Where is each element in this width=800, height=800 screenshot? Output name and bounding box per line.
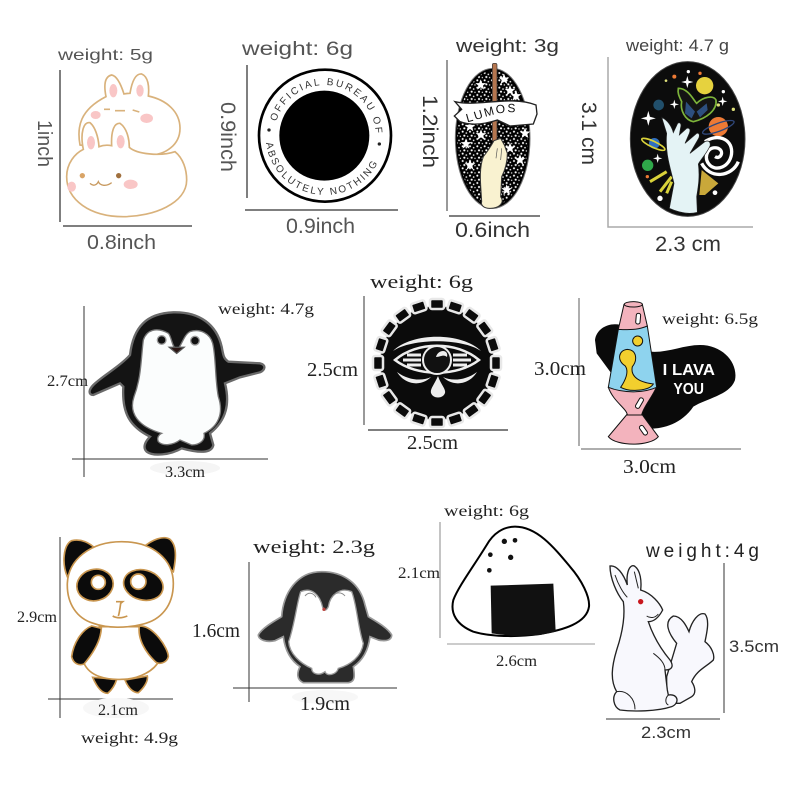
height line — [723, 563, 725, 713]
height label: 2.1cm — [398, 565, 441, 582]
pin: round black and white badge — [258, 68, 392, 203]
pin group: bunny stack — [33, 47, 192, 254]
shadow — [83, 698, 149, 718]
lamp base — [608, 414, 658, 444]
weight label: weight: 6.5g — [662, 311, 758, 328]
pin group: official bureau badge — [216, 39, 398, 238]
lamp slogan second line: YOU — [673, 381, 704, 398]
weight label: weight: 3g — [455, 36, 559, 56]
nose and mouth — [113, 602, 127, 618]
weight label: weight:4g — [645, 541, 759, 562]
pin group: onigiri — [398, 503, 595, 670]
shadow — [150, 461, 220, 475]
pin: I lava you — [595, 302, 735, 444]
front rabbit — [610, 566, 677, 711]
width line — [447, 643, 595, 645]
lamp top section — [618, 304, 647, 330]
pin group: rabbits — [606, 541, 779, 742]
width label: 3.0cm — [623, 456, 676, 478]
orange planet — [709, 117, 728, 136]
wand — [492, 63, 497, 142]
pin group: crying eye badge — [307, 272, 508, 454]
eye patches — [73, 565, 167, 605]
height label: 3.0cm — [534, 358, 586, 380]
badge dots — [267, 128, 381, 146]
blue planet — [649, 138, 660, 149]
width label: 2.5cm — [407, 432, 458, 454]
scattered light dots — [657, 70, 735, 201]
penguin belly — [132, 330, 221, 445]
yellow planet ring — [641, 136, 666, 152]
butterfly wings — [685, 102, 708, 118]
planet ring — [701, 118, 735, 137]
top bunny ears and face — [91, 84, 153, 123]
nori — [491, 584, 556, 636]
width line — [48, 698, 173, 700]
green planet — [642, 160, 653, 171]
rice body — [452, 527, 589, 636]
pin group: large penguin — [47, 301, 314, 481]
weight label: weight: 6g — [241, 39, 353, 60]
height line — [248, 562, 250, 702]
width label: 2.6cm — [496, 653, 538, 670]
height label: 0.9inch — [216, 102, 239, 172]
eye outline — [395, 346, 479, 373]
pin: two stacked bunnies — [67, 74, 187, 217]
badge ring — [259, 70, 391, 202]
pin: two white rabbits — [610, 566, 714, 711]
weight label: weight: 4.7 g — [625, 36, 729, 55]
lower lid — [397, 372, 477, 383]
pin: panda — [64, 538, 175, 693]
sesame seeds — [487, 538, 517, 573]
sparkle stars — [641, 76, 727, 163]
penguin eyes — [157, 336, 199, 345]
weight label: weight: 4.9g — [81, 730, 178, 747]
width label: 0.9inch — [286, 215, 355, 238]
top bunny — [79, 74, 180, 155]
height label: 1.2inch — [418, 95, 441, 168]
pin: lumos hand and wand — [453, 63, 538, 209]
height line — [439, 522, 441, 638]
width label: 1.9cm — [300, 693, 350, 715]
width line — [368, 429, 508, 431]
pin group: lumos — [418, 36, 559, 242]
butterfly outline — [678, 88, 716, 122]
beak — [322, 608, 326, 611]
yellow moon — [696, 77, 713, 94]
width line — [72, 458, 268, 460]
eyes — [91, 574, 146, 589]
galaxy spiral — [702, 138, 738, 174]
height label: 2.9cm — [17, 609, 58, 626]
penguin belly — [289, 590, 363, 675]
height label: 2.7cm — [47, 373, 89, 390]
width label: 0.8inch — [87, 232, 156, 254]
weight label: weight: 2.3g — [253, 537, 376, 558]
badge top text: OFFICIAL BUREAU OF — [270, 78, 382, 132]
stars — [461, 74, 530, 195]
rear rabbit — [667, 614, 714, 703]
width line — [606, 718, 720, 720]
penguin body — [258, 572, 392, 683]
pin: smiling penguin — [258, 572, 392, 683]
iris rays — [403, 355, 471, 365]
tear — [431, 376, 445, 398]
badge bottom text: ABSOLUTELY NOTHING — [266, 142, 376, 195]
eye brow — [393, 337, 481, 351]
lamp cap — [624, 302, 642, 307]
width line — [449, 215, 540, 217]
width line — [245, 209, 398, 211]
pin group: lava lamp — [534, 298, 758, 478]
pin: rice ball — [452, 527, 589, 636]
weight label: weight: 5g — [57, 47, 153, 64]
height line — [59, 537, 61, 718]
height label: 3.1 cm — [577, 102, 600, 165]
lamp glass — [608, 326, 657, 392]
height line — [363, 296, 365, 425]
body — [83, 627, 159, 679]
pupil highlight — [436, 351, 447, 357]
dot field — [457, 71, 528, 206]
width label: 2.3 cm — [655, 233, 721, 256]
feet — [93, 676, 147, 693]
weight label: weight: 6g — [444, 503, 529, 520]
rabbit details — [615, 572, 668, 709]
height line — [83, 306, 85, 477]
pin: penguin with open wings — [90, 312, 264, 455]
width line — [581, 448, 741, 450]
arms — [72, 626, 168, 665]
closed eyes — [305, 593, 345, 597]
hand — [480, 138, 507, 208]
height label: 3.5cm — [729, 637, 779, 656]
small teal planet — [653, 100, 664, 110]
pin group: panda — [17, 537, 178, 747]
height line — [59, 70, 61, 222]
bottom bunny ears and face — [67, 135, 138, 192]
pin: hand holding galaxy — [630, 62, 745, 216]
head — [67, 542, 173, 627]
bottom bunny — [67, 123, 187, 217]
weight label: weight: 6g — [370, 272, 474, 293]
lamp glints — [635, 313, 648, 436]
yellow streaks — [650, 172, 672, 193]
width line — [233, 687, 397, 689]
ears — [64, 538, 175, 577]
width label: 2.1cm — [98, 702, 139, 719]
shadow — [292, 690, 358, 704]
height label: 1.6cm — [192, 620, 240, 642]
width label: 2.3cm — [641, 723, 691, 742]
lava blob — [620, 349, 653, 390]
pin group: cosmic hand — [577, 36, 753, 256]
banner — [454, 101, 537, 126]
pin group: small penguin — [192, 537, 397, 715]
badge disc — [380, 306, 494, 420]
height line — [446, 60, 448, 211]
banner text: LUMOS — [466, 104, 515, 122]
lava bubble — [633, 336, 643, 346]
finger lines — [496, 148, 502, 160]
starry oval — [455, 68, 530, 208]
penguin beak — [169, 347, 184, 353]
lamp slogan: I LAVA — [663, 362, 715, 379]
rabbit eye — [638, 599, 643, 604]
height label: 1inch — [33, 120, 55, 167]
black oval — [630, 62, 745, 216]
weight label: weight: 4.7g — [218, 301, 314, 318]
height line — [246, 65, 248, 198]
pupil — [423, 346, 451, 374]
height label: 2.5cm — [307, 359, 358, 381]
penguin body — [90, 312, 264, 455]
hand — [662, 117, 710, 213]
lamp mid section — [608, 387, 657, 415]
scattered dots — [646, 72, 702, 178]
width label: 3.3cm — [165, 464, 206, 481]
badge rim blocks — [373, 299, 501, 427]
dimension lines — [608, 57, 753, 227]
height line — [578, 298, 580, 446]
pin: eye with tear — [373, 299, 501, 427]
width label: 0.6inch — [455, 219, 530, 242]
rocket — [699, 170, 718, 195]
badge centre — [279, 91, 369, 181]
black speech blob — [595, 324, 735, 429]
width line — [63, 225, 192, 227]
